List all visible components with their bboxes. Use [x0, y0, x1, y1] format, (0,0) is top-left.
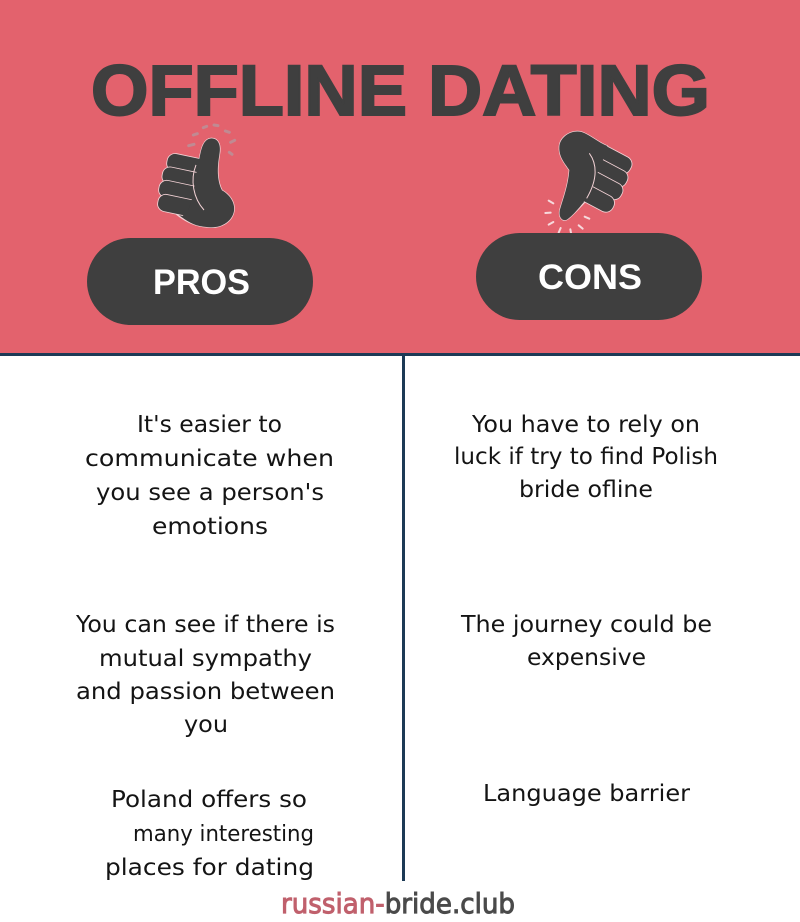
icon: thumbs down [545, 131, 635, 235]
pros item 1: communicate when [85, 444, 334, 472]
title [91, 52, 710, 131]
pros item 2: You can see if there is [75, 610, 335, 638]
title: OFFLINE [91, 52, 407, 131]
pros item 3: many interesting [133, 821, 314, 847]
cons item 2: expensive [527, 643, 646, 671]
cons badge: CONS [538, 258, 642, 297]
title: DATING [428, 52, 710, 131]
cons badge [476, 233, 702, 320]
pros badge: PROS [153, 263, 250, 302]
pros item 2: mutual sympathy [99, 644, 312, 672]
header panel [0, 0, 800, 354]
icon: thumbs up [156, 125, 235, 227]
cons item 2: The journey could be [460, 610, 712, 638]
cons item 2 [460, 610, 712, 671]
pros badge [87, 238, 313, 325]
cons item 1: luck if try to find Polish [454, 442, 718, 470]
cons item 1: bride ofline [519, 475, 653, 503]
cons item 1: You have to rely on [471, 410, 700, 438]
pros item 3: Poland offers so [111, 785, 307, 813]
horizontal divider [0, 353, 800, 356]
vertical divider [402, 355, 405, 881]
pros item 1 [85, 410, 334, 540]
pros item 1: you see a person's [96, 478, 324, 506]
pros item 3: places for dating [105, 853, 314, 881]
pros item 2: you [184, 710, 228, 738]
footer brand: russian-bride.club [281, 887, 515, 920]
pros item 2 [75, 610, 335, 738]
pros item 3 [105, 785, 314, 881]
pros item 1: It's easier to [137, 410, 282, 438]
pros item 1: emotions [152, 512, 268, 540]
cons item 1 [454, 410, 718, 503]
cons item 3: Language barrier [483, 779, 690, 807]
pros item 2: and passion between [76, 677, 335, 705]
